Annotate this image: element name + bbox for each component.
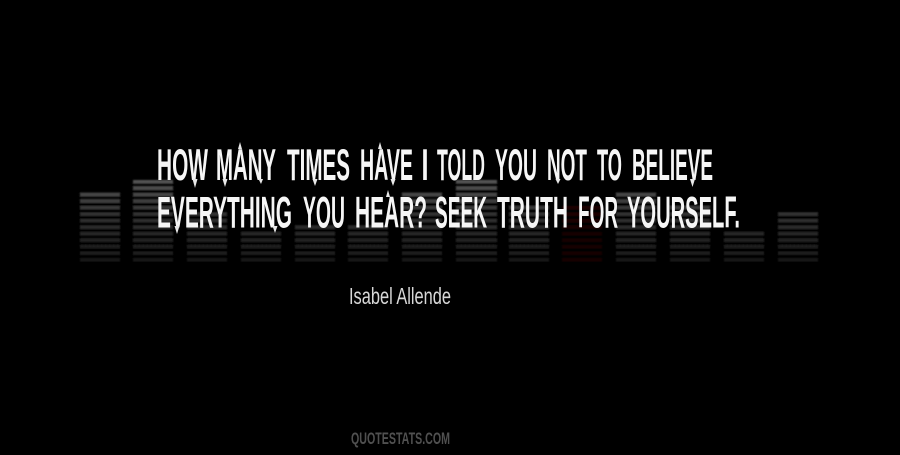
quote text — [157, 141, 740, 238]
quote line 2: EVERYTHING — [157, 188, 292, 238]
quote line 1: I — [422, 141, 428, 190]
quote line 1: NOT — [547, 141, 587, 190]
quote line 1: TOLD — [437, 141, 485, 190]
quote line 2: SEEK — [435, 188, 487, 238]
quote line 1 — [157, 141, 713, 190]
quote line 1: HOW — [157, 141, 208, 190]
quote line 1: TIMES — [287, 141, 350, 190]
quote line 1: YOU — [495, 141, 537, 190]
author name: Isabel Allende — [349, 283, 451, 309]
quote line 2: TRUTH — [497, 188, 568, 238]
quote line 2 — [157, 188, 740, 238]
quote line 2: HEAR? — [355, 188, 427, 238]
quote card: YOURSELF. — [627, 188, 740, 238]
equalizer bars backdrop — [70, 180, 830, 264]
quote line 1: MANY — [216, 141, 276, 190]
quote line 2: FOR — [578, 188, 618, 238]
letter spike accents — [174, 142, 695, 234]
quote text: BELIEVE — [632, 141, 713, 190]
quote line 1: TO — [597, 141, 622, 190]
quote line 2: YOU — [303, 188, 345, 238]
site credit: QUOTESTATS.COM — [351, 429, 450, 448]
quote line 1: HAVE — [360, 141, 413, 190]
